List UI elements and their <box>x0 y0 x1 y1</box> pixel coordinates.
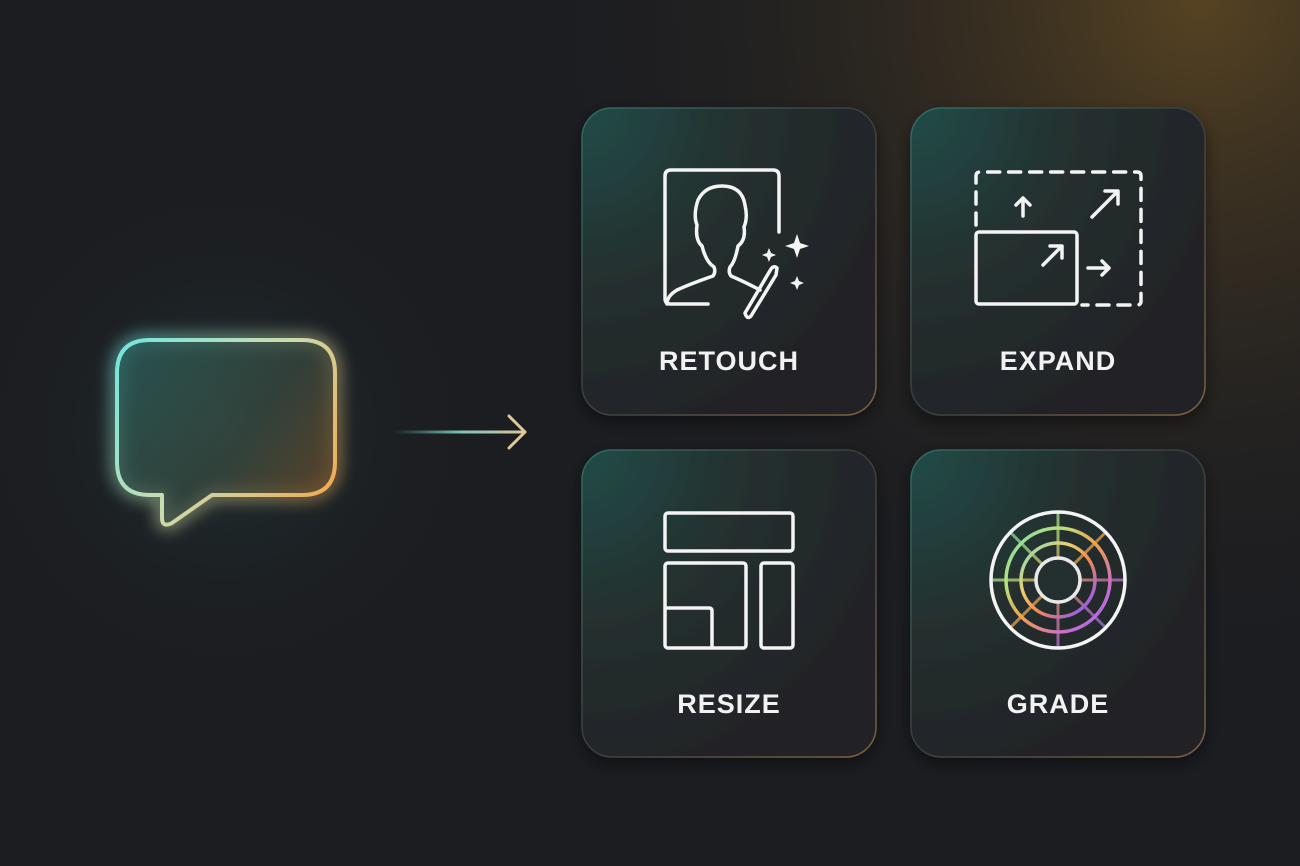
card: grade <box>911 450 1205 757</box>
speech bubble <box>117 340 335 525</box>
label: RETOUCH: RETOUCH <box>659 346 799 376</box>
label: RESIZE: RESIZE <box>677 689 781 719</box>
label: EXPAND: EXPAND <box>1000 346 1116 376</box>
arrow <box>392 416 525 448</box>
icon: layout blocks <box>665 513 793 648</box>
icon: expand canvas <box>976 172 1141 305</box>
card: retouch <box>582 108 876 415</box>
label: GRADE: GRADE <box>1007 689 1109 719</box>
card: expand <box>911 108 1205 415</box>
icon: portrait with magic wand <box>665 170 779 317</box>
card: resize <box>582 450 876 757</box>
icon: color wheel <box>991 512 1125 648</box>
